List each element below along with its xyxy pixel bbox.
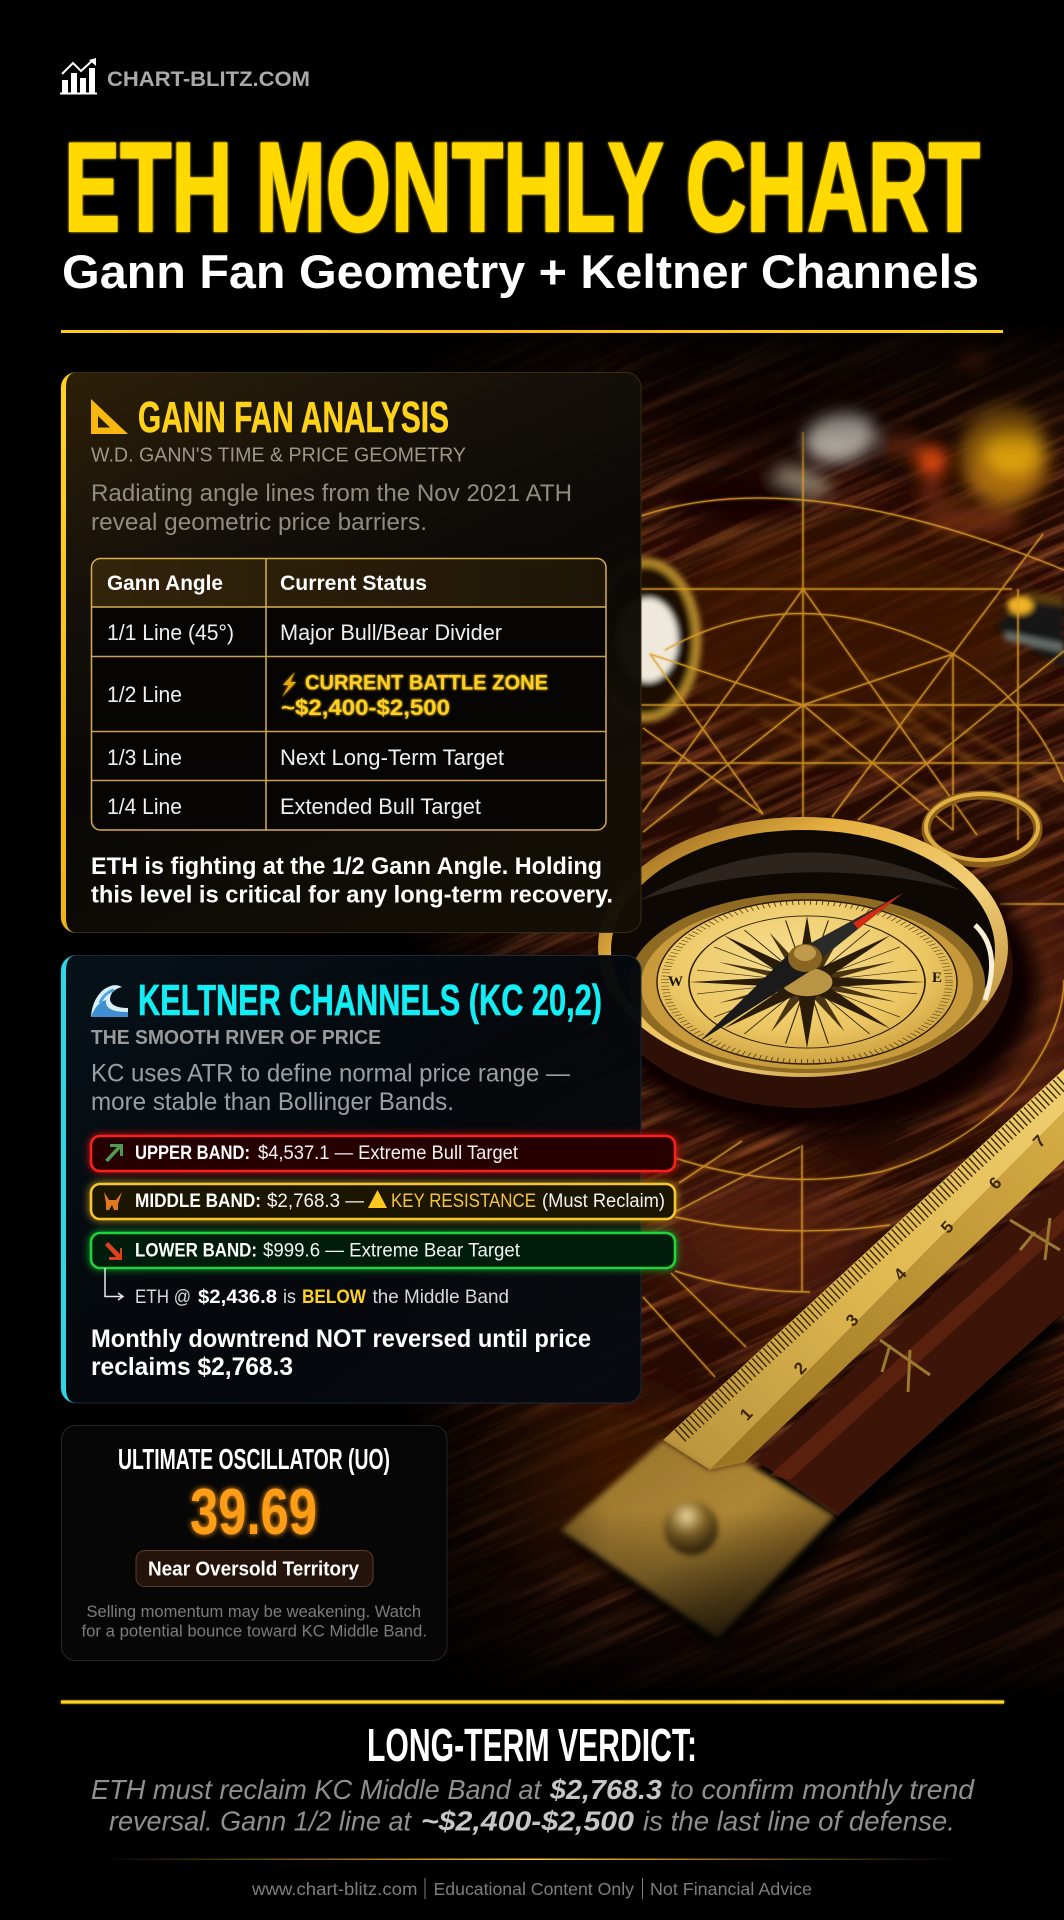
verdict text: to confirm monthly trend [670,1774,975,1805]
verdict divider [61,1700,1004,1704]
status pill [136,1550,373,1586]
icon: wave [91,985,128,1017]
description: reveal geometric price barriers. [91,509,427,536]
brand name: CHART-BLITZ.COM [107,67,310,91]
band: lower: LOWER BAND: [135,1240,257,1262]
description [91,480,572,536]
footer: www.chart-blitz.com [251,1879,418,1899]
blurred magnifier at left [593,562,697,718]
icon: bar chart with rising arrow [60,58,97,94]
description: more stable than Bollinger Bands. [91,1088,454,1116]
footer [251,1878,812,1899]
band: middle [91,1184,675,1219]
band: upper: UPPER BAND: [135,1142,250,1164]
ruler numerals: 3 [842,1310,863,1330]
band: middle: MIDDLE BAND: [135,1190,261,1212]
conclusion text: reclaims $2,768.3 [91,1353,293,1381]
verdict text: is the last line of defense. [643,1806,955,1836]
band: lower: $999.6 — Extreme Bear Target [263,1240,521,1262]
compass needle [700,893,903,1041]
footer divider [100,1858,960,1860]
panel: ultimate oscillator [62,1426,447,1660]
brass compass [593,817,1037,1133]
table header: Gann Angle [107,571,223,595]
verdict text: $2,768.3 [549,1774,662,1805]
panel: gann fan analysis [61,372,641,932]
edge fades [0,320,1064,480]
description: KC uses ATR to define normal price range — [91,1060,570,1088]
verdict heading: LONG-TERM VERDICT: [367,1719,697,1771]
subtitle: Gann Fan Geometry + Keltner Channels [62,245,979,298]
conclusion text: ETH is fighting at the 1/2 Gann Angle. Holding [91,853,602,880]
eth price note: is [283,1286,296,1308]
band: upper [91,1136,675,1171]
brand logo [60,58,310,94]
blurred bokeh objects [670,346,1049,534]
oscillator note [82,1603,427,1640]
oscillator title: ULTIMATE OSCILLATOR (UO) [118,1444,390,1476]
band: upper: $4,537.1 — Extreme Bull Target [258,1142,519,1164]
eth price note: the Middle Band [372,1286,509,1308]
table rows: Extended Bull Target [280,794,481,819]
subheading: THE SMOOTH RIVER OF PRICE [91,1026,381,1049]
highlighted battle zone [281,670,548,720]
highlighted battle zone: ~$2,400-$2,500 [281,695,450,720]
conclusion text: Monthly downtrend NOT reversed until price [91,1325,591,1353]
status pill: Near Oversold Territory [148,1558,360,1580]
engraved arrow marks [880,1218,1060,1392]
table rows: Next Long-Term Target [280,745,504,770]
ruler numerals: 2 [790,1358,811,1378]
ruler numerals: 7 [1029,1131,1050,1151]
band: middle: (Must Reclaim) [542,1190,665,1212]
verdict text: ~$2,400-$2,500 [421,1806,634,1836]
table rows: 1/1 Line (45°) [107,620,234,645]
table rows: Major Bull/Bear Divider [280,620,502,645]
compass loop ring [926,794,1038,863]
ruler numerals: 6 [985,1173,1006,1193]
description [91,1060,570,1116]
band: middle: $2,768.3 — [267,1190,364,1212]
header divider [61,330,1003,333]
ruler numerals [736,1131,1050,1424]
geometric gold construction lines [641,432,1064,1377]
verdict text [91,1774,975,1836]
footer: Educational Content Only [434,1879,634,1899]
ruler numerals: 4 [890,1264,911,1284]
heading: KELTNER CHANNELS (KC 20,2) [138,976,602,1025]
table rows [107,620,504,819]
conclusion text: this level is critical for any long-term recovery. [91,882,613,908]
table rows: 1/3 Line [107,745,182,770]
eth price note: BELOW [302,1286,367,1308]
brass screw [664,1501,718,1555]
table: gann angles [92,558,606,830]
verdict text: reversal. Gann 1/2 line at [109,1806,412,1836]
blurred pen at right [996,592,1064,668]
panel: keltner channels [61,956,675,1403]
conclusion text [91,1325,591,1381]
ruler numerals: 5 [937,1217,958,1237]
table header: Current Status [280,571,427,595]
highlighted battle zone: CURRENT BATTLE ZONE [305,670,548,694]
oscillator value: 39.69 [190,1475,317,1548]
band: lower [91,1233,675,1268]
conclusion text [91,853,613,908]
oscillator note: Selling momentum may be weakening. Watch [86,1603,421,1621]
compass rose [665,902,949,1062]
warm wood tones [480,370,1064,1620]
footer: Not Financial Advice [650,1879,812,1899]
ruler numerals: 1 [736,1404,757,1424]
compass cardinal letters: E [932,970,942,986]
brass ruler [560,1069,1064,1650]
table header [107,571,427,595]
eth price note: ETH @ [135,1286,191,1308]
compass cardinal letters: W [668,974,683,990]
gold streaks on the desk [700,670,1064,810]
icon: set square [91,399,128,434]
description: Radiating angle lines from the Nov 2021 ATH [91,480,572,507]
table rows: 1/2 Line [107,682,182,707]
table rows: 1/4 Line [107,794,182,819]
verdict text: ETH must reclaim KC Middle Band at [91,1774,542,1805]
arrow: connector to eth price [105,1268,123,1300]
band: middle: KEY RESISTANCE [391,1190,536,1212]
eth price note: $2,436.8 [198,1286,277,1308]
compass cardinal letters [668,970,942,990]
background photo: compass and ruler on wooden desk [0,320,1064,1700]
subheading: W.D. GANN'S TIME & PRICE GEOMETRY [91,444,466,466]
oscillator note: for a potential bounce toward KC Middle Band. [82,1622,427,1640]
heading: GANN FAN ANALYSIS [138,393,449,442]
